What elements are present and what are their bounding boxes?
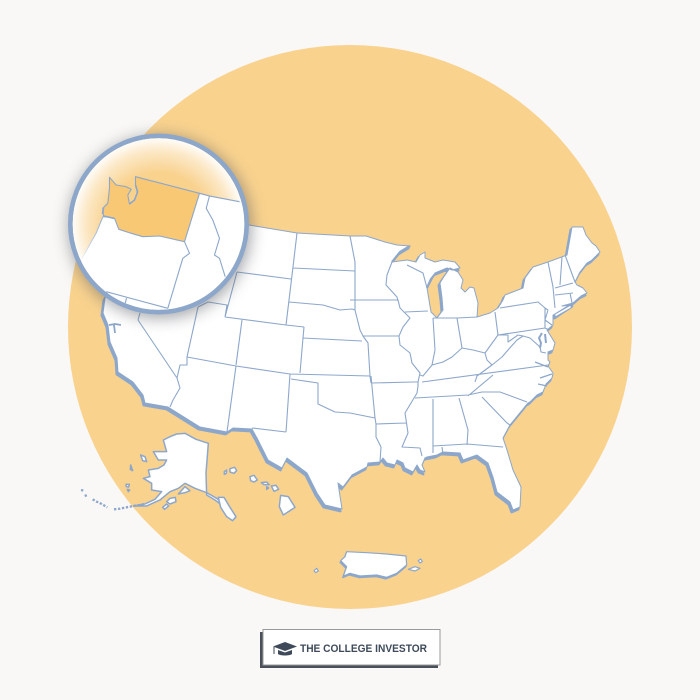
map: Hawaii: [224, 467, 295, 515]
lens ocean: [72, 140, 242, 294]
green bay and lake superior shore: [392, 246, 435, 288]
map: Puerto Rico: [314, 552, 422, 579]
edge glow: [72, 138, 244, 310]
map: Alaska: [81, 433, 236, 521]
state borders: [138, 233, 575, 462]
lens ring: [70, 136, 247, 312]
long island: [555, 306, 571, 316]
logo box: [263, 630, 440, 665]
infographic canvas: [59, 45, 632, 668]
logo wordmark: THE COLLEGE INVESTOR: [300, 643, 427, 655]
Puget Sound: [102, 185, 138, 218]
magnifier drop shadow: [69, 136, 251, 318]
lens land: [80, 192, 244, 310]
logo shadow: [260, 632, 438, 668]
chesapeake bay: [539, 333, 546, 348]
san francisco bay: [109, 324, 121, 333]
magnifier lens: [68, 134, 249, 314]
logo badge: [260, 630, 440, 668]
pamlico sound: [535, 362, 552, 386]
Washington state highlighted: [103, 177, 200, 242]
Oregon, Idaho and Montana borders: [106, 193, 240, 308]
map: contiguous United States: [102, 205, 600, 512]
background circle: [68, 45, 632, 609]
icon: graduation cap: [273, 642, 297, 656]
